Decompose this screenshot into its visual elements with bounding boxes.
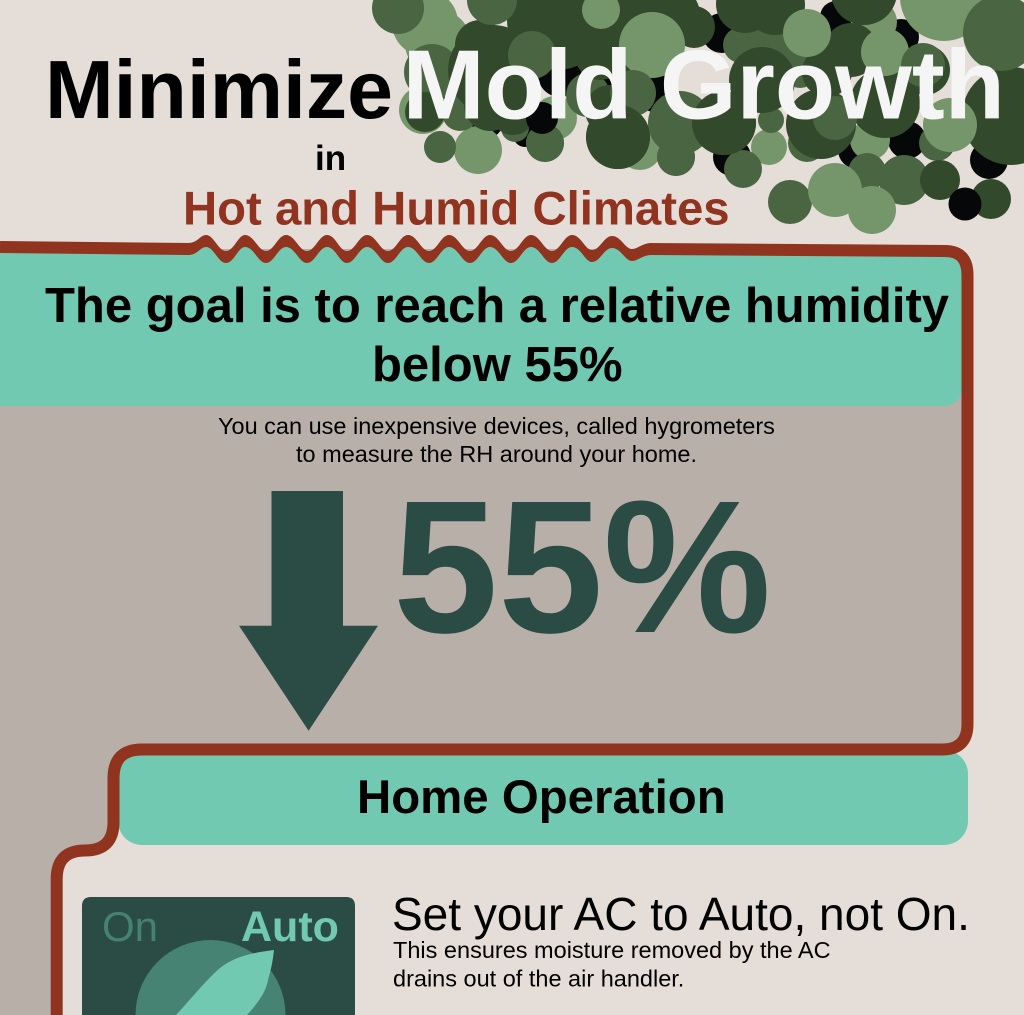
- grey humidity panel: [0, 247, 968, 1015]
- mold circles cluster: [372, 0, 1024, 234]
- title: in: in: [315, 139, 346, 178]
- red outline path: [0, 247, 968, 1015]
- red wave section: [188, 235, 652, 263]
- tip heading: AC Auto: Set your AC to Auto, not On.: [392, 888, 970, 940]
- heading: humidity goal: The goal is to reach a relative humidity: [45, 279, 949, 333]
- home operation banner background: [118, 750, 968, 845]
- title: Mold Growth: Mold Growth: [402, 30, 1005, 140]
- heading: humidity goal: [45, 279, 949, 392]
- goal banner background: [0, 241, 962, 406]
- tip body text: [393, 937, 831, 992]
- heading: humidity goal: below 55%: [372, 338, 623, 392]
- icon: dial circle: [136, 940, 286, 1015]
- title: Hot and Humid Climates: Hot and Humid Climates: [183, 182, 730, 236]
- title: Minimize: Minimize: [45, 44, 393, 136]
- heading: Home Operation: Home Operation: [357, 771, 726, 824]
- text: hygrometer note: [218, 413, 775, 467]
- label: On: On: [102, 903, 158, 950]
- icon: down arrow: [239, 491, 378, 731]
- text: hygrometer note: to measure the RH around your home.: [296, 441, 697, 467]
- label: Auto: Auto: [241, 903, 339, 951]
- panel: thermostat switch: [82, 897, 355, 1015]
- tip body text: This ensures moisture removed by the AC: [393, 937, 831, 963]
- big number: 55%: 55%: [393, 462, 771, 673]
- text: hygrometer note: You can use inexpensive devices, called hygrometers: [218, 413, 775, 439]
- tip body text: drains out of the air handler.: [393, 966, 684, 992]
- icon: dial pointer leaf: [176, 950, 274, 1015]
